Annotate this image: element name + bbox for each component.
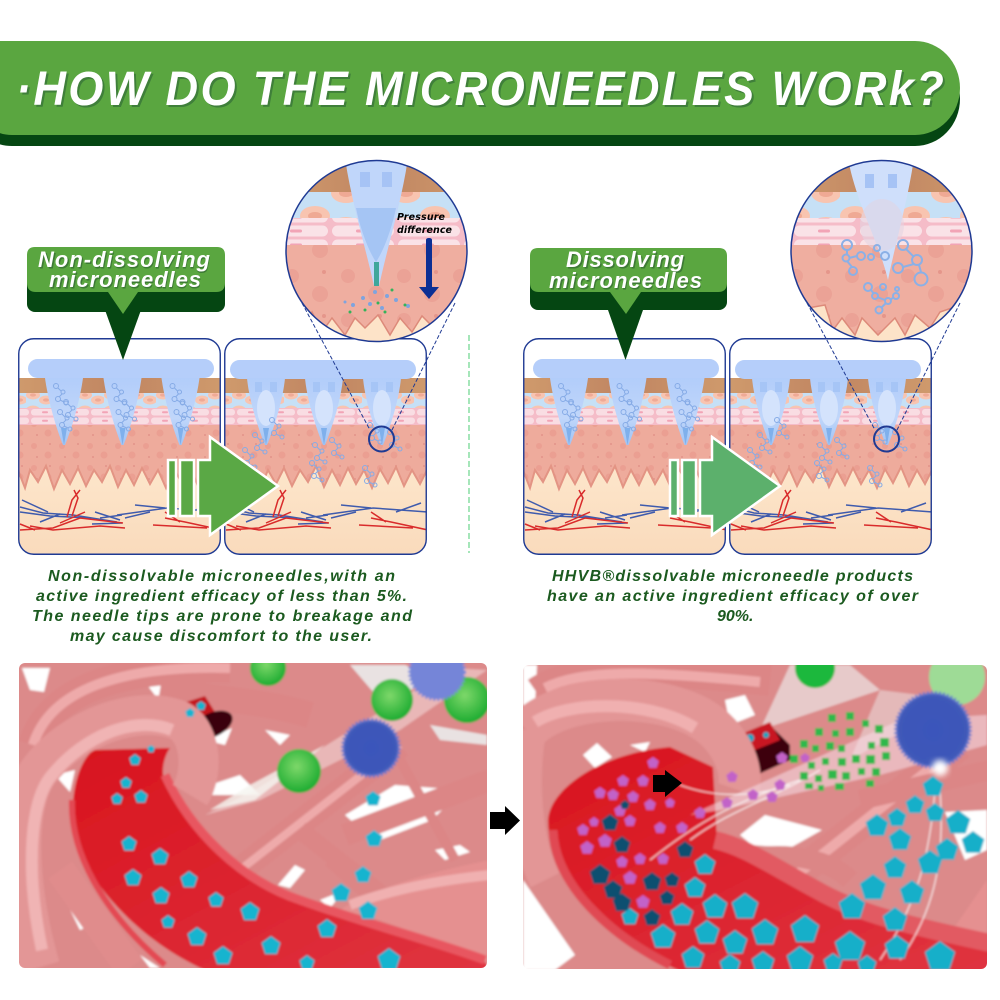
image: vessel after <box>520 648 990 974</box>
magnifier: left needle tip <box>285 160 468 342</box>
caption: non-dissolvable: The needle tips are prone to breakage and <box>32 608 413 625</box>
label: pressure difference <box>397 212 453 236</box>
zoom guide lines right <box>807 303 960 452</box>
arrow: left process <box>168 437 278 535</box>
arrow: right process <box>670 437 780 535</box>
callout: dissolving: Dissolving <box>568 248 686 274</box>
callout: non-dissolving <box>27 247 225 360</box>
title banner <box>0 41 960 146</box>
title banner: ·HOW DO THE MICRONEEDLES WORk? <box>18 64 946 117</box>
callout: non-dissolving: microneedles <box>49 267 201 292</box>
arrow: pressure <box>419 238 439 299</box>
callout: non-dissolving: Non-dissolving <box>40 248 211 274</box>
caption: non-dissolvable <box>32 568 413 645</box>
divider <box>468 335 470 553</box>
arrow: black pointer inside image <box>653 770 682 797</box>
caption: non-dissolvable: Non-dissolvable microneedles,with an <box>48 568 395 585</box>
caption: dissolvable: HHVB®dissolvable microneedle products <box>552 568 913 585</box>
caption: non-dissolvable: may cause discomfort to the user. <box>70 628 372 645</box>
caption: dissolvable: 90%. <box>717 608 753 625</box>
title banner: ·HOW DO THE MICRONEEDLES WORk? <box>16 62 944 115</box>
magnifier: right dissolved tip <box>790 160 973 342</box>
arrow: between images <box>490 806 520 835</box>
image: vessel before <box>15 645 490 972</box>
callout: dissolving: microneedles <box>549 268 702 293</box>
callout: non-dissolving: microneedles <box>50 268 202 294</box>
label: pressure difference: Pressure <box>397 212 446 223</box>
panel: non-dissolving skin diagrams <box>18 339 428 560</box>
callout: dissolving: microneedles <box>550 270 702 294</box>
label: pressure difference: difference <box>397 225 453 236</box>
caption: dissolvable: have an active ingredient efficacy of over <box>547 588 919 605</box>
panel: dissolving skin diagrams <box>523 339 933 560</box>
zoom guide lines left <box>302 303 455 452</box>
callout: dissolving <box>530 247 727 360</box>
caption: non-dissolvable: active ingredient efficacy of less than 5%. <box>36 588 407 605</box>
callout: dissolving: Dissolving <box>566 247 685 272</box>
callout: non-dissolving: Non-dissolving <box>38 247 211 272</box>
caption: dissolvable <box>547 568 919 625</box>
